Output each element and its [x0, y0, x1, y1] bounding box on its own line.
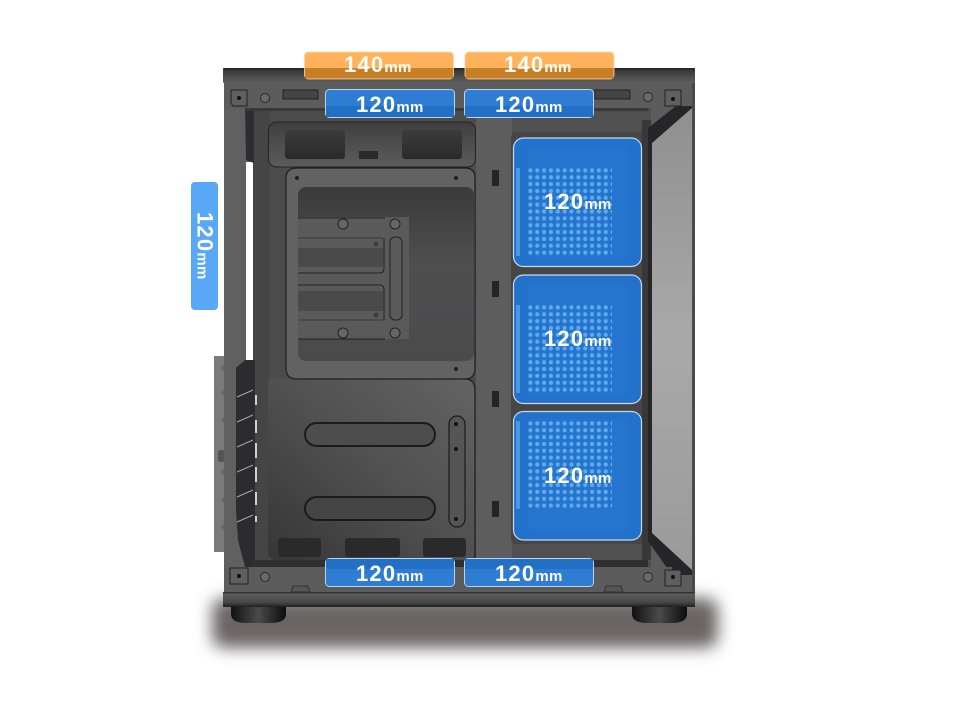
case interior — [253, 108, 651, 567]
cable slots — [305, 416, 465, 527]
panel: PC case — [223, 68, 695, 607]
fan: front 120mm middle: 120mm — [544, 326, 612, 351]
label: bottom 120mm right: 120mm — [495, 561, 563, 586]
left post — [224, 83, 246, 593]
label: rear 120mm — [191, 182, 218, 310]
top wall plate — [268, 122, 476, 167]
icon: left foot — [231, 606, 286, 623]
fan: front 120mm bottom: 120mm — [544, 463, 612, 488]
top right mount — [665, 90, 681, 106]
bottom vents — [278, 538, 466, 557]
panel: rear side plate — [214, 356, 226, 552]
bottom left mount — [230, 568, 248, 584]
front fan mount — [511, 132, 646, 544]
label: top 140mm left — [304, 52, 454, 79]
motherboard tray — [286, 168, 475, 379]
top bar — [223, 68, 695, 83]
bottom tab left — [291, 586, 310, 592]
right edge — [692, 83, 695, 593]
right interior column — [476, 112, 651, 562]
rear expansion grille — [236, 360, 256, 567]
label: top 140mm left: 140mm — [344, 52, 412, 77]
left wall — [253, 108, 270, 560]
fan: front 120mm bottom — [514, 412, 642, 540]
label: top 120mm left: 120mm — [356, 92, 424, 117]
top rear grille — [245, 108, 254, 163]
floor shadow — [212, 598, 718, 648]
icon: right foot — [632, 606, 687, 623]
top left mount — [231, 90, 247, 106]
front corner struts — [648, 106, 692, 575]
white gap beside left post — [246, 162, 253, 360]
label: bottom 120mm left — [326, 558, 454, 586]
glass front — [652, 108, 692, 570]
label: top 120mm right: 120mm — [495, 92, 563, 117]
fan: front 120mm top: 120mm — [544, 189, 612, 214]
fan: front 120mm top — [514, 138, 642, 266]
label: top 140mm right — [465, 52, 614, 79]
label: top 120mm right — [464, 90, 594, 118]
fan: front 120mm middle — [514, 275, 642, 404]
top frame — [224, 83, 648, 108]
lower tray — [268, 379, 475, 560]
bottom bar — [223, 592, 695, 607]
bottom frame — [224, 567, 672, 593]
label: rear 120mm: 120 mm — [192, 212, 218, 280]
CPU backplate bracket — [298, 217, 409, 339]
label: bottom 120mm left: 120mm — [356, 561, 424, 586]
CPU cutout — [298, 187, 474, 361]
label: top 120mm left — [326, 90, 454, 118]
case frame — [224, 80, 695, 595]
bottom right mount — [665, 570, 681, 586]
bottom tab right — [604, 586, 623, 592]
column clips — [492, 170, 499, 517]
tray screws — [295, 176, 458, 371]
label: top 140mm right: 140mm — [504, 52, 572, 77]
lower tray outline — [465, 379, 475, 558]
label: bottom 120mm right — [464, 558, 594, 586]
